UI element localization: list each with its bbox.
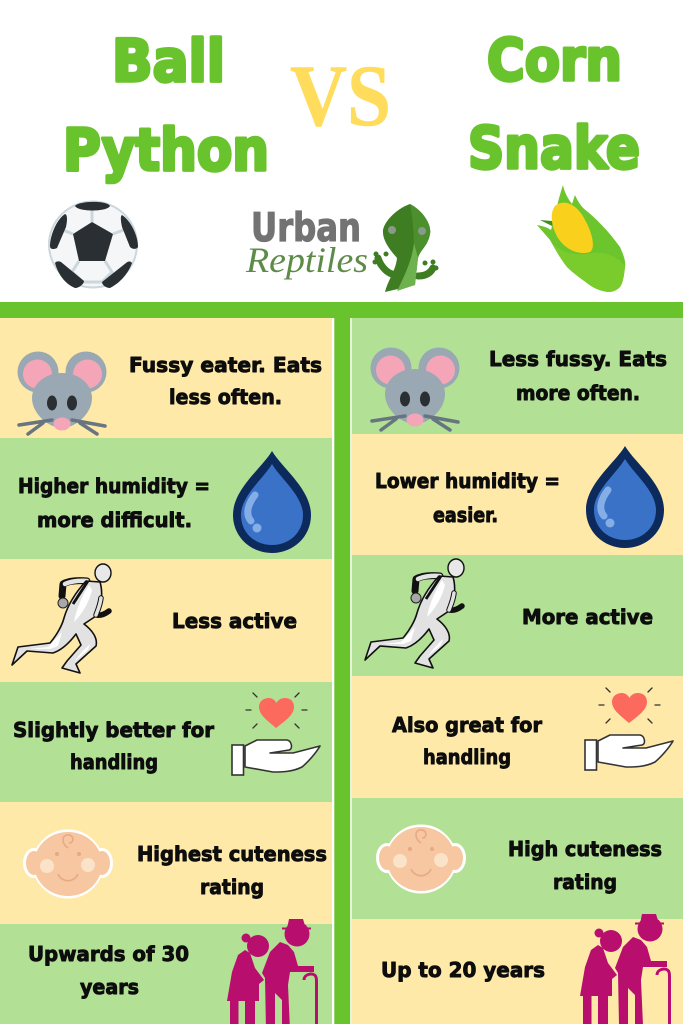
logo: Urban Reptiles	[245, 204, 438, 292]
row: handling	[0, 682, 332, 802]
icon: soccer ball	[49, 202, 138, 288]
title: Corn Snake	[468, 26, 640, 182]
title: Ball Python: Ball	[112, 27, 225, 95]
text: feeding: Fussy eater. Eats	[129, 353, 322, 377]
text: handling	[13, 718, 214, 774]
text: cuteness	[508, 837, 662, 894]
icon: baby face	[25, 831, 111, 897]
text: lifespan: Upwards of 30	[28, 942, 189, 966]
row: lifespan	[0, 919, 332, 1024]
row: feeding	[0, 318, 332, 438]
green header band	[0, 302, 683, 1024]
row: handling	[352, 676, 683, 798]
icon: elderly couple	[580, 914, 670, 1024]
row: activity	[0, 559, 332, 682]
text: cuteness: rating	[200, 875, 264, 899]
text: humidity	[18, 474, 210, 532]
text: feeding: Less fussy. Eats	[489, 347, 667, 371]
row: feeding	[352, 318, 683, 434]
icon: water drop	[233, 451, 311, 553]
logo: Urban Reptiles: Urban	[251, 206, 361, 251]
text: feeding: less often.	[169, 385, 282, 409]
icon: runner	[12, 564, 111, 673]
text: cuteness: High cuteness	[508, 837, 662, 861]
text: handling: handling	[70, 750, 158, 774]
text: lifespan: years	[80, 975, 139, 999]
text: handling	[392, 713, 542, 769]
row: activity	[352, 555, 683, 676]
title: Corn Snake: Corn	[487, 26, 622, 94]
title: Ball Python: Python	[63, 116, 269, 184]
text: humidity	[375, 469, 560, 527]
text: activity: Less active	[172, 609, 297, 633]
row: cuteness	[0, 802, 332, 924]
text: cuteness	[137, 842, 327, 899]
icon: corn	[537, 185, 625, 292]
text: feeding: more often.	[516, 381, 640, 405]
panel: Corn Snake column	[352, 318, 683, 1024]
row: humidity	[352, 434, 683, 555]
text: feeding	[489, 347, 667, 405]
text: humidity: more difficult.	[37, 508, 192, 532]
text: humidity: Lower humidity =	[375, 469, 560, 493]
icon: mouse	[18, 352, 106, 434]
row: humidity	[0, 438, 332, 559]
logo: Urban Reptiles: Reptiles	[245, 240, 368, 280]
icon: lizard	[372, 204, 438, 292]
text: feeding	[129, 353, 322, 409]
icon: heart in hand	[232, 693, 320, 775]
text: humidity: easier.	[433, 503, 498, 527]
text: lifespan: Up to 20 years	[381, 958, 545, 982]
panel: Ball Python column	[0, 318, 352, 1024]
icon: mouse	[370, 348, 460, 430]
title: VS: VS	[290, 48, 391, 145]
title: Ball Python	[63, 27, 269, 184]
text: activity: More active	[522, 605, 653, 629]
text: handling: handling	[423, 745, 511, 769]
text: handling: Also great for	[392, 713, 542, 737]
text: lifespan	[28, 942, 189, 999]
icon: heart in hand	[585, 688, 673, 770]
text: cuteness: rating	[553, 870, 617, 894]
text: humidity: Higher humidity =	[18, 474, 210, 498]
row: lifespan	[352, 914, 683, 1024]
icon: baby face	[378, 826, 464, 892]
icon: runner	[365, 559, 464, 668]
icon: elderly couple	[227, 919, 316, 1024]
text: cuteness: Highest cuteness	[137, 842, 327, 866]
row: cuteness	[352, 798, 683, 919]
icon: water drop	[586, 446, 664, 548]
text: handling: Slightly better for	[13, 718, 214, 742]
title: Corn Snake: Snake	[468, 114, 640, 182]
